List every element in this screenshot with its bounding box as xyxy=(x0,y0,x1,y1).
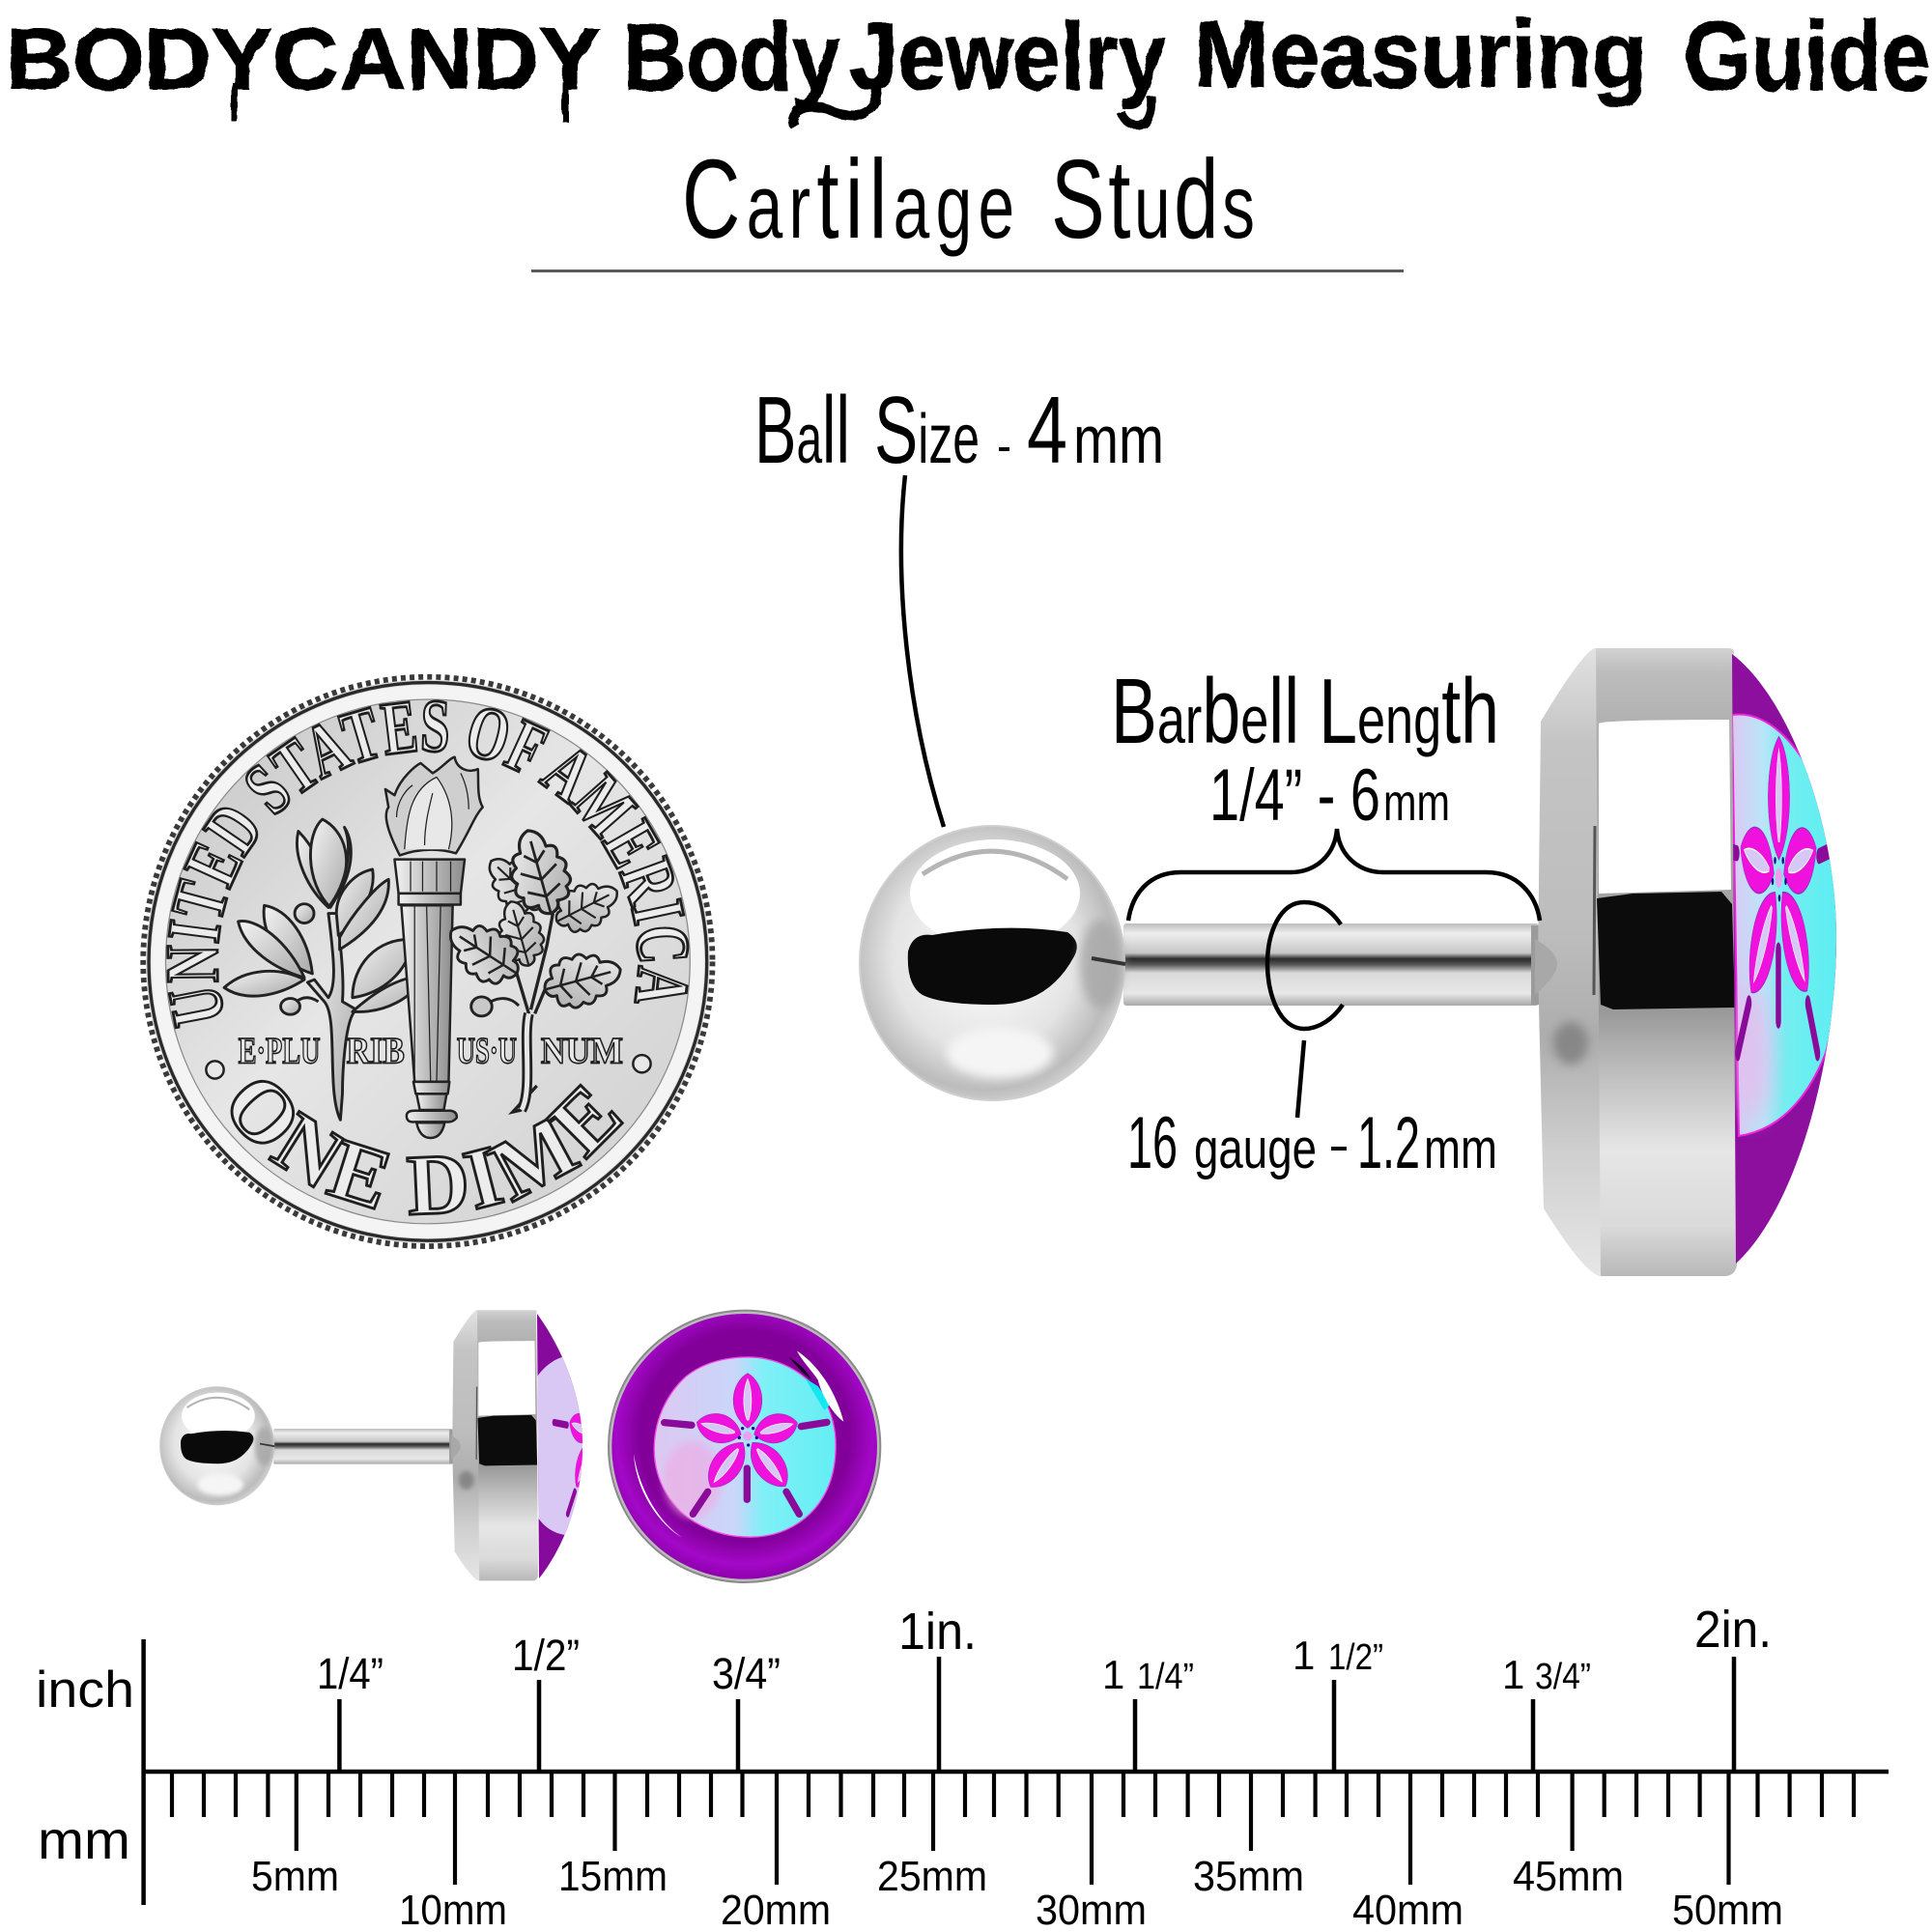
title: BODYCANDY xyxy=(6,12,601,108)
coin motto: NUM xyxy=(541,1029,623,1071)
barbell length label: mm xyxy=(1383,774,1450,832)
ruler inch labels: 1/2” xyxy=(1328,1637,1383,1678)
ruler inch labels: 3/4” xyxy=(1535,1657,1591,1697)
glare highlights xyxy=(634,1350,843,1538)
coin motto xyxy=(239,1029,623,1071)
subtitle xyxy=(682,138,1255,262)
coin: olive branch xyxy=(224,819,422,1120)
coin legend: one dime: ONE DIME xyxy=(230,1080,624,1216)
coin: one dime reverse xyxy=(140,674,715,1249)
barbell length label xyxy=(1111,660,1499,837)
ball size label: mm xyxy=(1073,402,1164,477)
coin motto: RIB xyxy=(347,1029,405,1071)
gauge label: 16 xyxy=(1127,1102,1178,1184)
ruler inch labels: 1 xyxy=(1293,1633,1315,1678)
ruler inch labels xyxy=(317,1601,1772,1698)
coin: torch xyxy=(385,757,483,1138)
arrow: ball size leader xyxy=(901,475,944,827)
ruler inch labels: 3/4” xyxy=(712,1649,781,1698)
ruler inch labels: 1 xyxy=(1502,1652,1524,1697)
ruler unit labels xyxy=(36,1662,134,1870)
ball size label: 4 xyxy=(1027,377,1067,483)
ball size label: Ball xyxy=(754,377,850,483)
gauge label: gauge xyxy=(1194,1118,1317,1180)
title: Measuring xyxy=(1194,1,1647,107)
ball size label: Size xyxy=(874,377,980,483)
ruler inch labels: 1/4” xyxy=(317,1649,384,1698)
barbell length label: Barbell Length xyxy=(1111,660,1499,763)
subtitle: Cartilage xyxy=(682,138,1014,262)
ruler mm labels: 45mm xyxy=(1513,1853,1624,1900)
coin motto: E·PLU xyxy=(239,1029,321,1071)
barbell length label: 1/4” - 6 xyxy=(1209,754,1380,837)
ruler unit labels: inch xyxy=(36,1662,134,1719)
ruler inch labels: 2in. xyxy=(1694,1601,1772,1659)
title xyxy=(6,1,1930,126)
coin: oak branch xyxy=(438,823,627,1112)
ruler xyxy=(36,1601,1889,1932)
ruler inch ticks xyxy=(339,1657,1734,1772)
ball size label xyxy=(754,377,1164,483)
small stud dome xyxy=(537,1314,582,1578)
ruler axis xyxy=(142,1639,1889,1905)
large stud dome xyxy=(1732,654,1836,1264)
subtitle: Studs xyxy=(1051,138,1255,262)
coin legend: united states of america: UNITED STATES OF AMERICA xyxy=(166,699,690,1030)
coin motto: US·U xyxy=(457,1029,517,1071)
ruler mm labels: 5mm xyxy=(251,1853,339,1900)
gauge ring xyxy=(1267,902,1343,1029)
ruler inch labels: 1/4” xyxy=(1137,1657,1194,1697)
ruler unit labels: mm xyxy=(38,1809,130,1870)
arrow: gauge leader xyxy=(1297,1040,1304,1118)
ruler inch labels: 1 xyxy=(1102,1652,1124,1697)
ruler mm ticks xyxy=(172,1772,1854,1885)
gauge label xyxy=(1127,1102,1497,1184)
ruler inch labels: 1in. xyxy=(898,1603,977,1661)
ruler mm labels xyxy=(251,1853,1783,1932)
gauge label: 1.2 xyxy=(1357,1102,1420,1184)
ruler mm labels: 25mm xyxy=(877,1853,987,1900)
large stud side view metal xyxy=(860,648,1737,1276)
stud front view xyxy=(609,1311,880,1582)
gauge label: mm xyxy=(1424,1118,1497,1180)
ruler mm labels: 15mm xyxy=(558,1853,668,1900)
small stud side view metal xyxy=(160,1310,538,1580)
title: Body xyxy=(623,4,840,110)
title: Jewelry xyxy=(850,3,1166,109)
ruler inch labels: 1/2” xyxy=(512,1631,580,1680)
ruler mm labels: 35mm xyxy=(1193,1853,1304,1900)
arrow: barbell length brace xyxy=(1128,829,1540,921)
